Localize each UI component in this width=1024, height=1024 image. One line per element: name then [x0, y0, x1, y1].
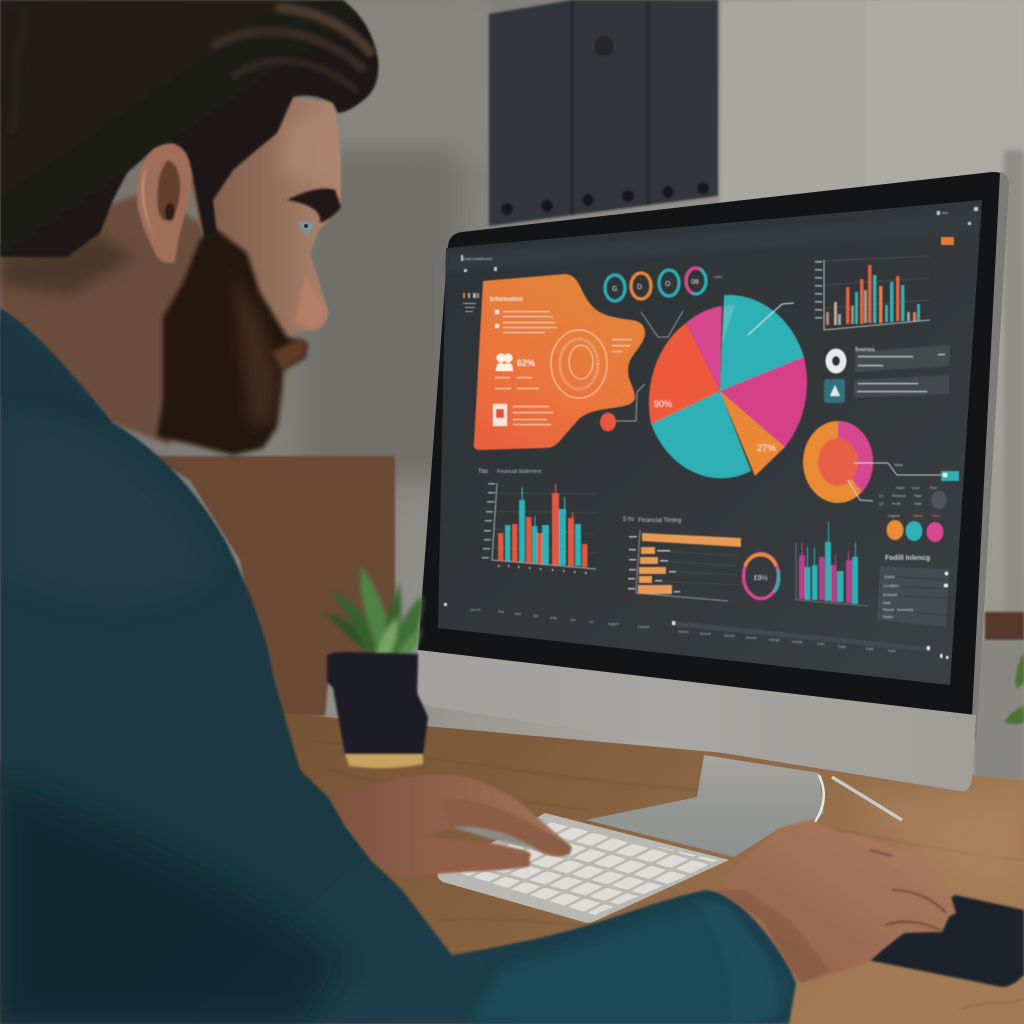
wrist shadow [715, 890, 830, 983]
legend table small: Profit [892, 502, 900, 506]
settings table: Notes [883, 615, 893, 619]
legend table small: Revenue [892, 494, 906, 498]
top bar [461, 207, 978, 272]
moustache [272, 338, 307, 370]
pot base [345, 754, 423, 768]
settings table: Result [883, 608, 895, 612]
top bar: 24 Jan [936, 210, 948, 215]
progress ring [744, 554, 779, 598]
orange info panel: Information [490, 297, 523, 303]
legend table small: Total [914, 502, 922, 506]
horizontal bar chart: 5 hs [623, 517, 634, 523]
back of hand [330, 775, 572, 877]
colored legend dots: Status [913, 514, 923, 518]
icon: people [496, 354, 513, 371]
dashboard [444, 207, 978, 659]
bottom timeline: August [608, 622, 619, 626]
binders on shelf [489, 0, 718, 226]
legend table small [879, 486, 947, 509]
row panels [855, 345, 950, 372]
left hand on keyboard [330, 775, 572, 877]
slice labels: 90% [654, 399, 672, 409]
bottom timeline: Feb [498, 610, 504, 614]
thumb and finger gap [448, 822, 540, 850]
beard highlights [232, 270, 280, 425]
eye [298, 221, 315, 236]
bottom timeline: Period [724, 634, 734, 638]
bottom timeline: Data [866, 647, 874, 651]
horizontal bar chart: Financial Timing [638, 518, 681, 524]
right edge [972, 172, 1009, 745]
pie chart: 27% [757, 443, 777, 454]
bottom left bar chart: Tbs [478, 469, 488, 475]
chin [418, 650, 976, 791]
bottom timeline: Data [817, 642, 825, 646]
right background box and shelf [975, 612, 1024, 780]
right background plant leaves [1004, 652, 1024, 724]
leaves [325, 566, 423, 660]
pie chart [649, 295, 807, 478]
side icons [463, 293, 479, 312]
progress ring: £9½ [754, 574, 768, 582]
ring 4: 08 [691, 279, 699, 286]
plant in pot [325, 566, 428, 768]
right hand on mouse [715, 820, 956, 983]
document icon [493, 404, 507, 426]
beard [157, 227, 307, 455]
desk surface [0, 712, 1024, 1024]
bottom timeline: Mar [515, 612, 522, 616]
legend table small: Plan [930, 486, 937, 490]
bottom timeline: Data [888, 649, 896, 653]
screen [438, 200, 982, 685]
bottom timeline: Range [792, 640, 803, 644]
bottom left bar chart [478, 469, 596, 574]
neck shadow [0, 236, 135, 295]
stand rod [832, 777, 902, 820]
right side info rows: Sources [855, 347, 875, 353]
KPI rings [605, 268, 706, 301]
settings table: Analysis [883, 593, 897, 597]
settings table: Date [883, 601, 891, 605]
bottom timeline: Range [769, 638, 780, 642]
bottom left bar chart: Financial Statement [497, 469, 542, 475]
settings table: Summary [897, 608, 913, 612]
legend table small: Q2 [879, 502, 884, 506]
thumb [420, 840, 530, 874]
monitor stand [586, 755, 902, 857]
monitor [418, 172, 1009, 791]
bottom timeline: Jun [570, 618, 576, 622]
cable [815, 775, 824, 822]
legend table small: Total [914, 494, 922, 498]
settings table: Status [884, 575, 895, 579]
colored legend dots: Value [932, 514, 941, 518]
legend table small: Sales [896, 486, 905, 490]
icon: red dot with leader [600, 384, 645, 432]
circular dial [551, 330, 607, 398]
forehead highlight [280, 115, 335, 180]
settings table: Condition [883, 584, 899, 588]
top bar: Data Dashboard [463, 256, 492, 261]
bottom timeline [444, 603, 948, 659]
sweater [0, 308, 796, 1024]
bottom timeline: Period [678, 630, 688, 634]
legend table small: Q1 [879, 494, 884, 498]
dashboard: Label [714, 275, 723, 279]
horizontal bar chart [623, 517, 741, 601]
legend table small: Cost [912, 486, 919, 490]
pot [327, 652, 428, 754]
bottom timeline: October [637, 625, 651, 629]
icon: teal tile [824, 379, 845, 403]
bottom timeline: Jul [589, 620, 594, 624]
settings table [877, 555, 949, 627]
ring 1: G [612, 286, 617, 293]
finger creases [870, 850, 946, 930]
brown board behind plant [150, 456, 395, 716]
donut chart: Value [894, 463, 903, 467]
neck [0, 190, 225, 445]
ring 2: D [637, 284, 642, 291]
magenta and teal bar chart [796, 522, 868, 606]
bottom timeline: May [550, 616, 557, 620]
colored legend dots [886, 514, 944, 542]
hair [0, 0, 378, 257]
donut chart [803, 421, 959, 503]
icon: white disc [826, 348, 846, 374]
keyboard [438, 813, 729, 923]
ear [137, 143, 191, 263]
hair highlights [12, 8, 370, 130]
bottom timeline: Jan 01 [470, 608, 481, 612]
index finger [440, 799, 572, 856]
bottom timeline: Period [746, 636, 756, 640]
face [190, 97, 341, 345]
nose highlight [295, 275, 326, 328]
ring 3: O [665, 281, 671, 288]
mouse pad [868, 895, 1024, 987]
bottom timeline: Apr [533, 614, 539, 618]
bottom timeline: Period [700, 632, 710, 636]
colored legend dots: Legend [888, 514, 900, 518]
bottom timeline: Data [838, 645, 846, 649]
orange info panel [474, 274, 645, 450]
bezel [418, 172, 1008, 716]
top right bar chart [815, 256, 930, 330]
eyebrow [287, 189, 341, 223]
sweater shading [0, 320, 785, 1024]
panel figures: 62% [517, 358, 535, 368]
settings table: Fodill Inlencg [885, 555, 930, 562]
right side info rows [824, 345, 950, 403]
